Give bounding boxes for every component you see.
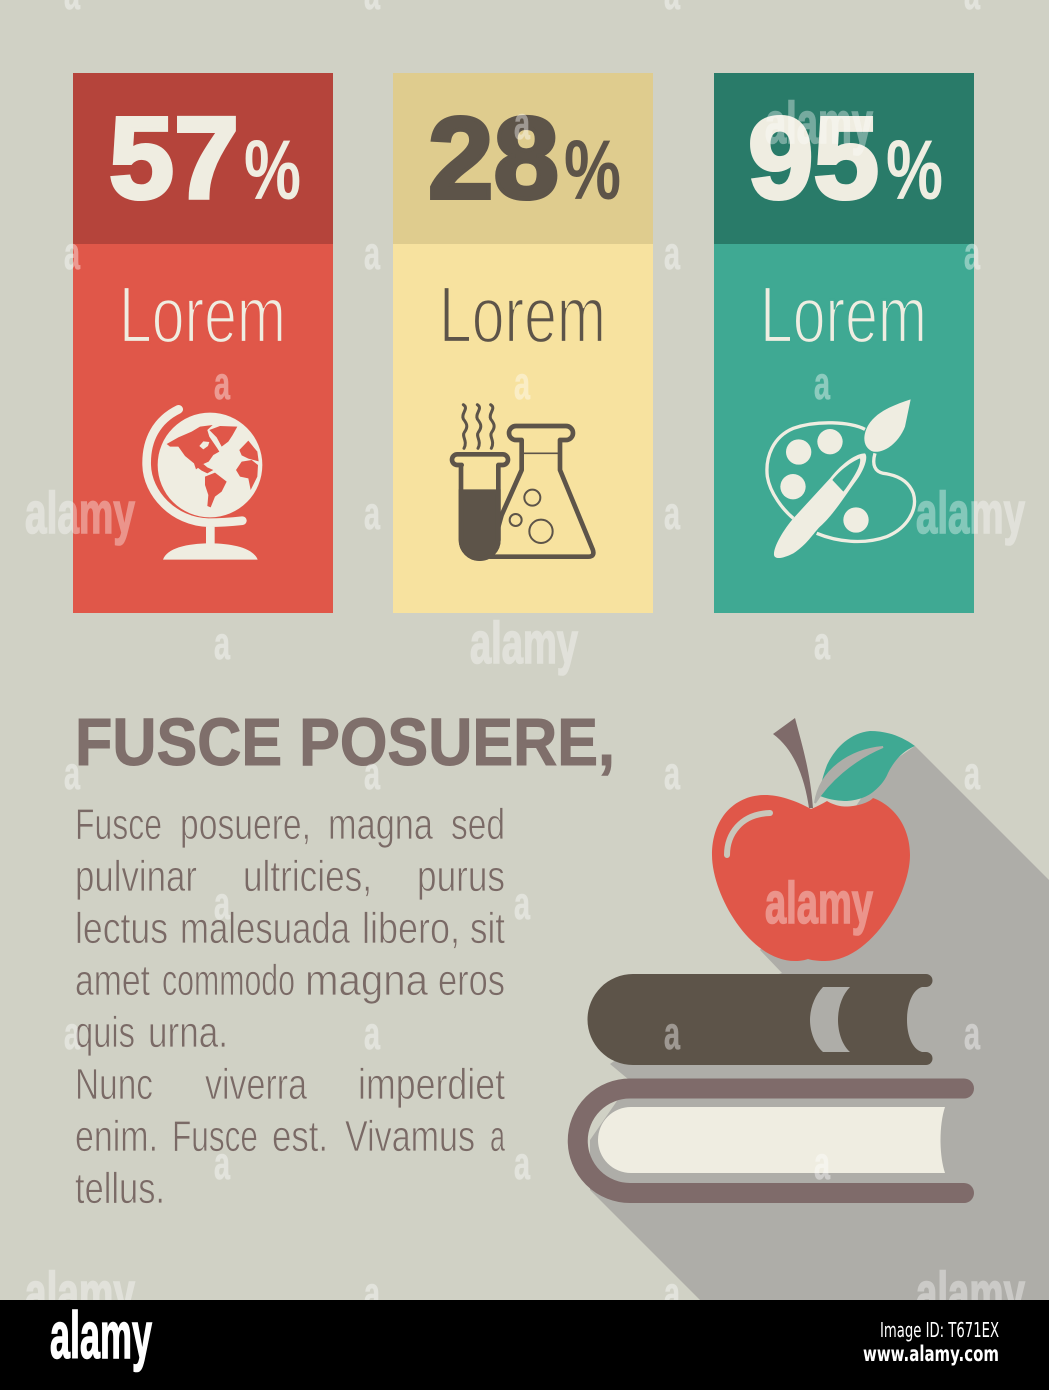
body text: magna bbox=[328, 800, 433, 849]
long shadow bbox=[590, 746, 1049, 1300]
body text: libero, bbox=[362, 904, 460, 953]
apple body bbox=[712, 795, 910, 961]
watermarks: a bbox=[214, 1137, 230, 1189]
body text: sed bbox=[451, 800, 505, 849]
heading: FUSCE POSUERE, bbox=[75, 705, 615, 780]
watermarks: a bbox=[364, 487, 380, 539]
website: www.alamy.com bbox=[863, 1342, 999, 1366]
watermarks: alamy bbox=[765, 91, 873, 156]
apple stem bbox=[773, 718, 813, 808]
icon: flask and test tube bbox=[452, 405, 593, 559]
body text: Fusce bbox=[75, 800, 162, 849]
panel: 57% geography bbox=[73, 73, 333, 613]
body text: posuere, bbox=[180, 800, 311, 849]
body text: ultricies, bbox=[243, 852, 372, 901]
body text: lectus bbox=[75, 904, 168, 953]
watermarks: a bbox=[64, 747, 80, 799]
stat: 28%: % bbox=[564, 123, 621, 217]
stat: 57%: 57 bbox=[109, 93, 239, 223]
body text: tellus. bbox=[75, 1164, 165, 1213]
label: Lorem: Lorem bbox=[439, 270, 606, 359]
body text: sit bbox=[470, 904, 505, 953]
body text: commodo bbox=[162, 956, 295, 1005]
panel: 28% science bbox=[393, 73, 653, 613]
body text: malesuada bbox=[180, 904, 350, 953]
body text: amet bbox=[75, 956, 150, 1005]
watermarks: a bbox=[364, 227, 380, 279]
body text: Fusce bbox=[172, 1112, 258, 1161]
watermarks: a bbox=[514, 97, 530, 149]
watermarks: alamy bbox=[25, 481, 135, 546]
watermarks: alamy bbox=[765, 871, 873, 936]
body text bbox=[75, 800, 505, 1213]
watermarks: a bbox=[514, 1137, 530, 1189]
top book bbox=[588, 974, 933, 1065]
watermarks: a bbox=[514, 357, 530, 409]
footer bar bbox=[0, 1298, 1049, 1390]
body text: a bbox=[490, 1112, 505, 1161]
body text: Nunc bbox=[75, 1060, 153, 1109]
stat: 95%: 95 bbox=[748, 93, 879, 223]
watermarks: a bbox=[664, 227, 680, 279]
stat: 28% bbox=[428, 93, 621, 223]
body text: est. bbox=[272, 1112, 328, 1161]
apple highlight bbox=[727, 813, 770, 855]
watermarks: alamy bbox=[470, 611, 578, 676]
watermarks: a bbox=[664, 1007, 680, 1059]
body text: pulvinar bbox=[75, 852, 197, 901]
watermarks: a bbox=[214, 357, 230, 409]
stat: 95% bbox=[748, 93, 943, 223]
stat: 95%: % bbox=[886, 123, 943, 217]
watermarks: a bbox=[964, 1007, 980, 1059]
label: Lorem: Lorem bbox=[119, 270, 286, 359]
watermarks: a bbox=[364, 747, 380, 799]
watermarks: a bbox=[214, 617, 230, 669]
stat: 28%: 28 bbox=[428, 93, 559, 223]
watermarks: a bbox=[364, 1267, 380, 1319]
watermarks: a bbox=[814, 617, 830, 669]
watermarks: a bbox=[514, 877, 530, 929]
watermarks: a bbox=[664, 747, 680, 799]
watermarks: a bbox=[664, 487, 680, 539]
watermarks: a bbox=[64, 1007, 80, 1059]
watermarks: a bbox=[64, 227, 80, 279]
body text: quis bbox=[75, 1008, 135, 1057]
panel: 95% art bbox=[714, 73, 974, 613]
icon: globe bbox=[147, 409, 262, 560]
apple leaf bbox=[815, 731, 915, 803]
bottom book bbox=[578, 1088, 964, 1193]
watermarks: a bbox=[214, 877, 230, 929]
icon: apple on books bbox=[578, 718, 964, 1193]
watermarks: a bbox=[964, 227, 980, 279]
body text: imperdiet bbox=[358, 1060, 505, 1109]
stat: 57% bbox=[109, 93, 301, 223]
watermarks: a bbox=[964, 747, 980, 799]
icon: paint palette and brush bbox=[767, 399, 914, 558]
stat: 57%: % bbox=[244, 123, 301, 217]
watermarks: a bbox=[814, 1137, 830, 1189]
body text: urna. bbox=[148, 1008, 228, 1057]
body text: magna bbox=[305, 956, 428, 1005]
footer logo: alamy bbox=[50, 1298, 152, 1372]
watermarks: a bbox=[814, 357, 830, 409]
body text: eros bbox=[438, 956, 505, 1005]
body text: Vivamus bbox=[345, 1112, 475, 1161]
watermarks: a bbox=[664, 1267, 680, 1319]
body text: viverra bbox=[205, 1060, 307, 1109]
body text: enim. bbox=[75, 1112, 158, 1161]
label: Lorem: Lorem bbox=[760, 270, 927, 359]
watermarks: a bbox=[364, 1007, 380, 1059]
body text: purus bbox=[417, 852, 505, 901]
watermarks: alamy bbox=[25, 1261, 135, 1326]
